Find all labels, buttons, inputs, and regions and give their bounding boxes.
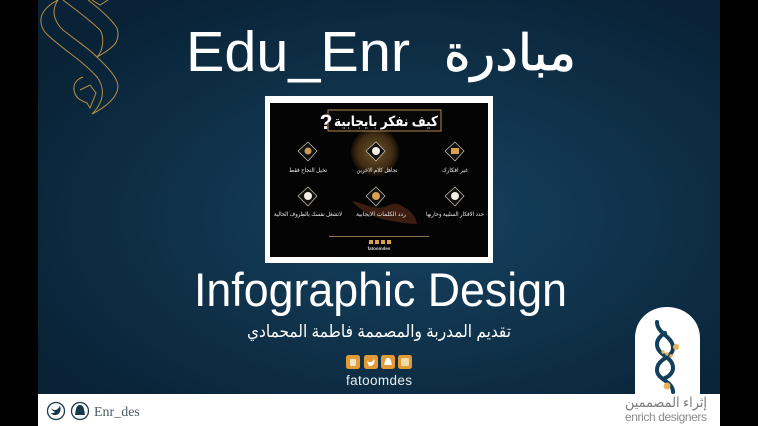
brain glow: [351, 128, 399, 176]
social icons row: [346, 355, 412, 369]
subtitle: presenter: تقديم المدربة والمصممة فاطمة المحمادي: [247, 322, 511, 342]
thumbnail labels: حدد الافكار السلبية وحاربها: [426, 211, 484, 218]
thumbnail handle: fatoomdes: [368, 246, 391, 251]
thumbnail labels: [274, 167, 484, 218]
thumbnail icon centers: [304, 147, 459, 200]
panel: infographic thumbnail: [265, 96, 493, 263]
footer bar: [38, 394, 720, 426]
social handle: fatoomdes: [346, 373, 412, 388]
thumbnail labels: تجاهل كلام الاخرين: [356, 167, 398, 174]
thumbnail heading: ?: [320, 111, 332, 134]
thumbnail social icons: [369, 240, 391, 244]
footer handle: Enr_des: [94, 405, 140, 420]
title: Arabic initiative word: مبادرة: [444, 25, 576, 82]
logo: arch badge: [635, 307, 700, 396]
icon: twitter: [48, 402, 64, 420]
logo text: English: enrich designers: [625, 410, 707, 424]
hand: [352, 201, 417, 224]
thumbnail labels: غير افكارك: [442, 167, 468, 174]
title: Edu_Enr: Edu_Enr: [186, 20, 410, 84]
thumbnail footer rule: [329, 236, 429, 237]
thumbnail items diamonds: [298, 142, 464, 206]
logo text: Arabic: إثراء المصممين: [625, 394, 707, 411]
thumbnail labels: لاتشغل نفسك بالظروف الحالية: [274, 211, 342, 218]
heading: Infographic Design: Infographic Design: [194, 263, 567, 316]
thumbnail heading: كيف نفكر بايجابية: [334, 113, 439, 130]
icon: gold outline helix: [41, 0, 118, 114]
icon: snapchat: [72, 402, 88, 420]
thumbnail labels: تخيل النجاح فقط: [289, 167, 327, 174]
thumbnail heading: [320, 110, 441, 134]
thumbnail labels: ردد الكلمات الايجابية: [356, 211, 406, 218]
